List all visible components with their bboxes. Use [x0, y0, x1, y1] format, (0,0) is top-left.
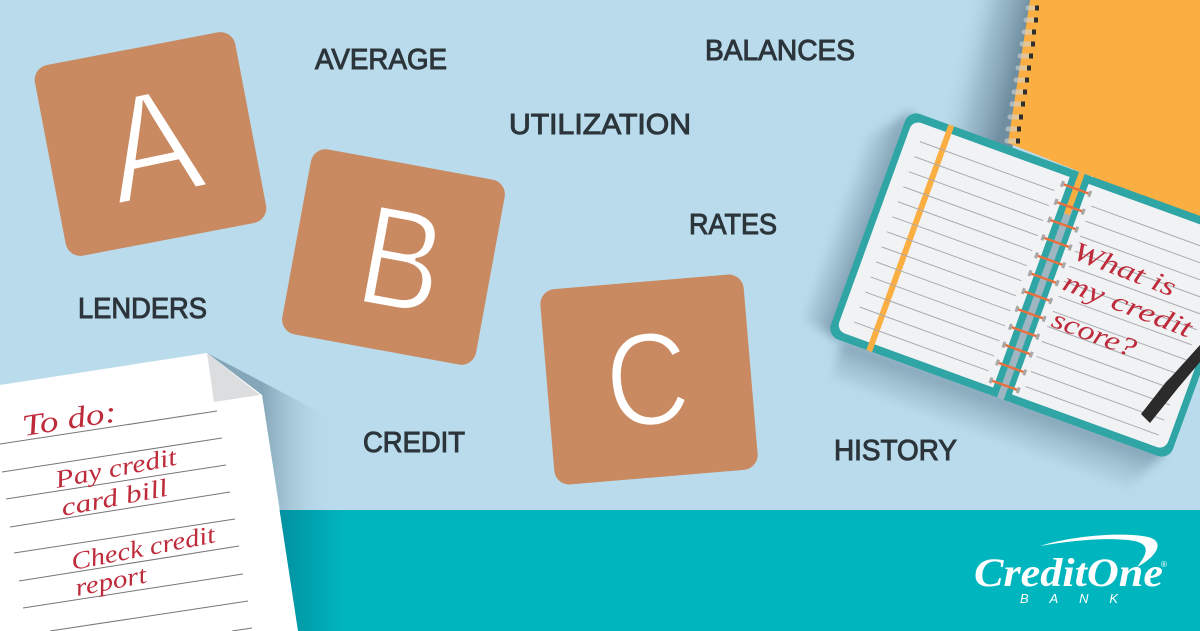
tile: letter B: [280, 147, 507, 367]
shadow of open notebook, bottom side: [832, 338, 1166, 488]
tile: letter C: [539, 273, 759, 486]
handwritten question: my credit: [1059, 267, 1198, 344]
logo: Credit One Bank: [974, 535, 1167, 606]
shadow of open notebook, left side: [804, 110, 914, 342]
orange elastic band: [866, 124, 954, 352]
shadow of paper: [207, 353, 335, 510]
left page: [836, 120, 1078, 391]
handwritten to-do list: [20, 395, 219, 602]
spiral binding: [989, 181, 1092, 394]
registered mark: ®: [1161, 560, 1167, 569]
left cover: [827, 110, 1081, 398]
logo BANK: BANK: [1020, 591, 1119, 606]
word: HISTORY: HISTORY: [834, 435, 957, 467]
folded corner: [207, 353, 260, 402]
icon: black pen: [1141, 345, 1200, 423]
handwritten to-do list: To do:: [20, 395, 119, 443]
letter C: C: [599, 302, 695, 457]
word: LENDERS: LENDERS: [78, 293, 207, 325]
handwritten to-do list: report: [73, 561, 150, 602]
letter A: A: [89, 53, 216, 236]
shadow of orange notebook: [930, 0, 1036, 150]
right page: [1004, 181, 1200, 450]
word: CREDIT: CREDIT: [363, 427, 465, 459]
handwritten to-do list: card bill: [59, 475, 170, 522]
footer shadow near paper: [270, 510, 346, 631]
word: BALANCES: BALANCES: [705, 35, 855, 67]
open notebook: [827, 110, 1200, 460]
handwritten question: [1048, 236, 1198, 363]
tile: letter A: [32, 30, 269, 258]
letter B: B: [347, 174, 457, 346]
word: AVERAGE: AVERAGE: [315, 44, 447, 76]
handwritten question: score?: [1048, 304, 1141, 363]
handwritten to-do list: Check credit: [69, 521, 219, 576]
left page rules: [854, 142, 1054, 371]
word: UTILIZATION: UTILIZATION: [509, 109, 691, 141]
logo wordmark: CreditOne: [974, 550, 1163, 595]
logo swoosh: [1040, 535, 1158, 567]
orange notebook: [1007, 0, 1200, 220]
handwritten question: What is: [1069, 236, 1180, 302]
right page rules: [1025, 206, 1200, 435]
word: RATES: RATES: [689, 209, 777, 241]
paper rules: [0, 411, 252, 631]
spine: [990, 170, 1091, 402]
right cover: [1002, 174, 1200, 460]
handwritten to-do list: Pay credit: [52, 444, 180, 494]
to-do paper sheet: [0, 353, 298, 631]
teal footer band: [0, 510, 1200, 631]
